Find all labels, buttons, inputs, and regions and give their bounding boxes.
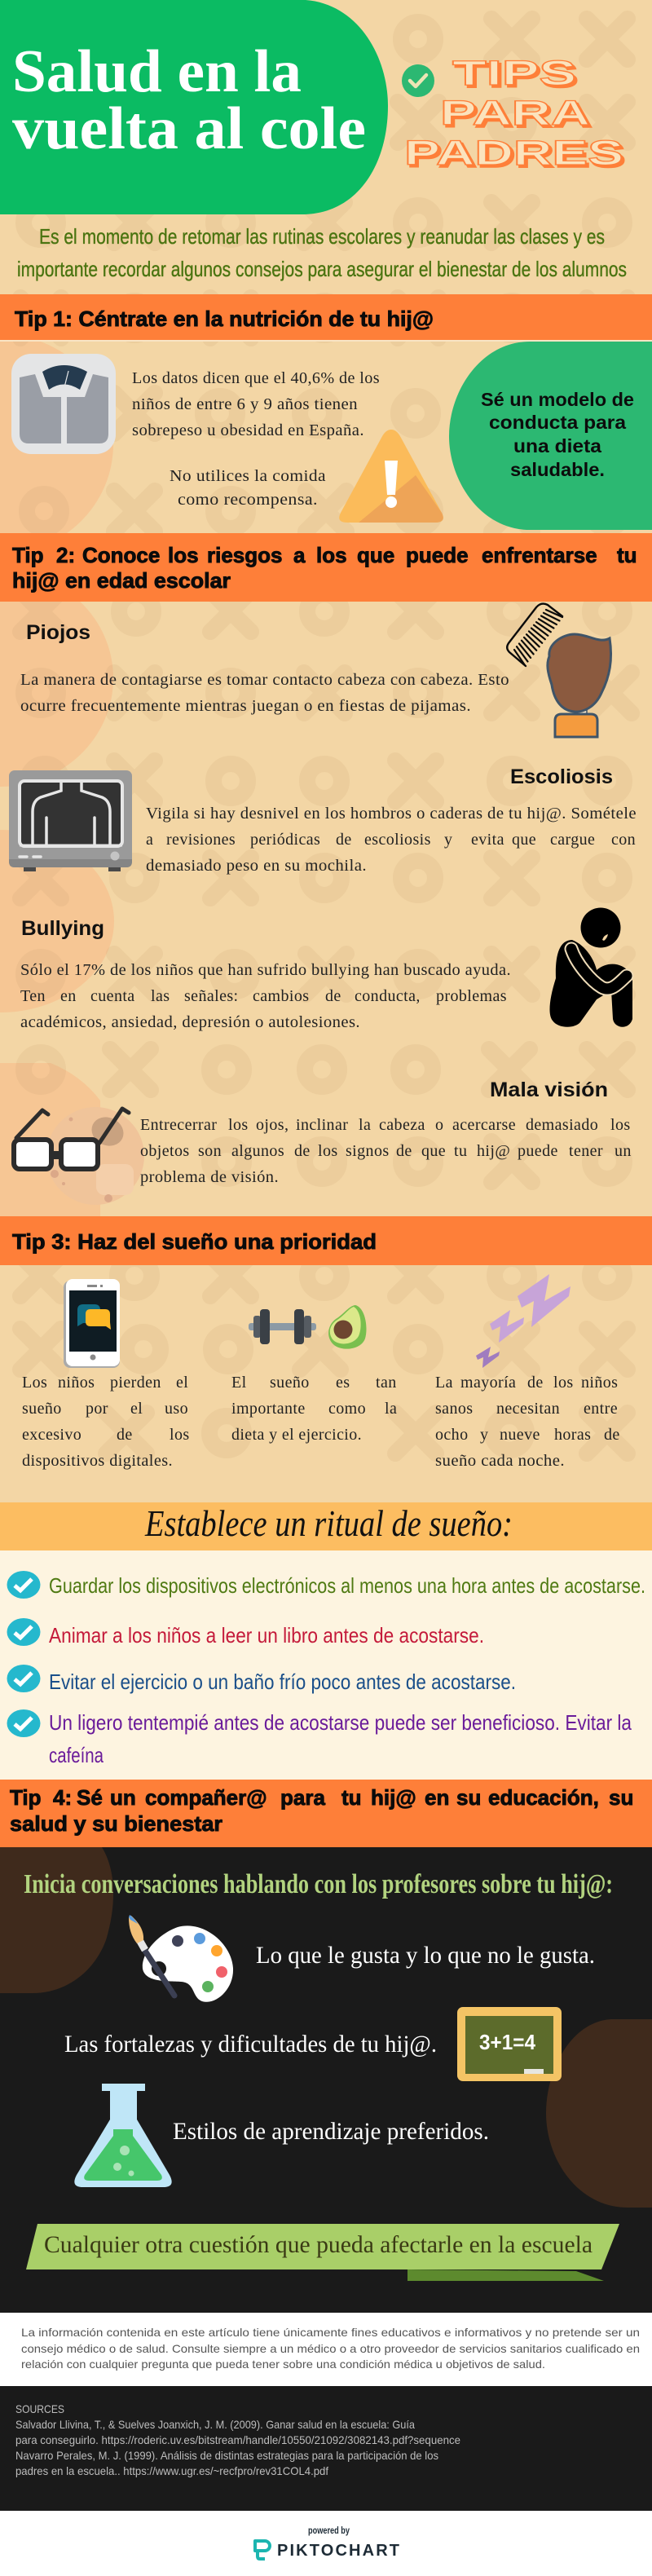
callout: role model: conducta para: [489, 412, 626, 433]
heading band: tip 4: [0, 1780, 652, 1847]
text block: sleep hours: y: [480, 1426, 488, 1444]
callout: role model: [449, 342, 652, 530]
text block: mala vision: algunos: [231, 1142, 284, 1160]
heading band: tip 4: para: [280, 1785, 325, 1810]
text block: bullying: en: [60, 987, 77, 1005]
text block: escoliosis: cargue: [550, 831, 595, 849]
text block: escoliosis: que: [512, 831, 536, 849]
text block: bullying: cuenta: [90, 987, 135, 1005]
list item: exercise: Evitar el ejercicio o un baño frío poco antes de acostarse.: [49, 1670, 516, 1694]
text block: mala vision: cabeza: [379, 1116, 425, 1134]
text block: mala vision: que: [421, 1142, 446, 1160]
panel: teacher conversations: [0, 1847, 652, 2313]
text block: bullying: cambios: [253, 987, 309, 1005]
heading band: tip 2: [0, 533, 652, 602]
heading band: tip 2: Conoce: [82, 543, 160, 567]
icon: flask: [74, 2084, 172, 2187]
text block: escoliosis: demasiado peso en su mochila.: [146, 857, 367, 875]
text block: mala vision: los: [318, 1142, 338, 1160]
heading band: tip 4: 4:: [53, 1785, 72, 1810]
heading band: tip 4: Sé: [77, 1785, 103, 1810]
heading band: tip 4: compañer@: [145, 1785, 267, 1810]
text block: devices: uso: [165, 1400, 188, 1418]
text block: sleep hours: ocho: [435, 1426, 468, 1444]
panel: disclaimer: consejo médico o de salud. Consulte siempre a un médico o a otro proveedor de servicios sanitarios cualificado en: [21, 2342, 640, 2355]
panel: sources: Navarro Perales, M. J. (1999). Análisis de distintas estrategias para la participación de los: [15, 2449, 438, 2462]
subtitle: tips para padres: PARA: [443, 96, 593, 135]
icon: blackboard: 3+1=4: [479, 2030, 536, 2054]
text block: sleep hours: La: [435, 1374, 453, 1392]
text block: devices: por: [86, 1400, 108, 1418]
heading: mala vision: Mala visión: [490, 1078, 608, 1101]
text block: sleep hours: nueve: [500, 1426, 540, 1444]
text block: sleep importance: El: [231, 1374, 247, 1392]
heading band: tip 4: su: [456, 1785, 481, 1810]
text: learning styles: Estilos de aprendizaje preferidos.: [173, 2118, 489, 2145]
panel: sources: para conseguirlo. https://roderic.uv.es/bitstream/handle/10550/21092/3082143.pdf?sequence: [15, 2433, 460, 2446]
heading band: tip 4: en: [425, 1785, 449, 1810]
panel: mala vision: [14, 1078, 632, 1205]
panel: disclaimer: [0, 2313, 652, 2386]
text block: mala vision: la: [359, 1116, 371, 1134]
subtitle: tips para padres: TIPS: [455, 56, 579, 95]
text block: devices: de: [117, 1426, 133, 1444]
text block: mala vision: de: [294, 1142, 311, 1160]
subtitle: tips para padres: [404, 54, 626, 175]
text block: sleep importance: como: [328, 1400, 366, 1418]
text block: mala vision: acercarse: [452, 1116, 516, 1134]
text block: piojos: La manera de contagiarse es tomar contacto cabeza con cabeza. Esto: [20, 671, 509, 689]
text block: sleep hours: sanos: [435, 1400, 473, 1418]
text block: mala vision: tu: [454, 1142, 467, 1160]
title: Salud en la: [12, 38, 302, 105]
text block: sleep importance: dieta y el ejercicio.: [231, 1426, 362, 1444]
text block: escoliosis: revisiones: [166, 831, 236, 849]
icon: warning triangle: [339, 430, 443, 523]
icon: dumbbell: [249, 1309, 316, 1344]
heading band: tip 2: que: [357, 543, 394, 567]
text block: mala vision: tener: [569, 1142, 603, 1160]
heading band: tip 2: los: [316, 543, 347, 567]
text block: mala vision: o: [435, 1116, 443, 1134]
panel: escoliosis: [9, 765, 637, 875]
title: vuelta al cole: [12, 95, 366, 162]
heading: bullying: Bullying: [21, 917, 104, 940]
text block: mala vision: Entrecerrar: [140, 1116, 217, 1134]
heading band: tip 3: Tip 3: Haz del sueño una prioridad: [12, 1229, 377, 1254]
list item: snack: cafeína: [49, 1743, 104, 1767]
ribbon: other issues: Cualquier otra cuestión que pueda afectarle en la escuela: [44, 2231, 593, 2258]
heading band: tip 2: los: [168, 543, 199, 567]
heading band: sleep ritual: Establece un ritual de sueño:: [144, 1502, 513, 1544]
list item: snack: [7, 1709, 632, 1767]
footer: piktochart: PIKTOCHART: [277, 2542, 399, 2560]
panel: bullying: [20, 908, 632, 1031]
text block: sleep importance: importante: [231, 1400, 306, 1418]
heading band: tip 3: [0, 1216, 652, 1265]
icon: phone: [64, 1279, 120, 1368]
text block: sleep importance: sueño: [270, 1374, 310, 1392]
text block: piojos: ocurre frecuentemente mientras juegan o en fiestas de pijamas.: [20, 697, 471, 715]
panel: sources: SOURCES: [15, 2402, 64, 2415]
text block: bullying: Sólo el 17% de los niños que han sufrido bullying han buscado ayuda.: [20, 961, 511, 979]
icon: child head: [548, 634, 611, 737]
text block: mala vision: problema de visión.: [140, 1168, 279, 1186]
text block: mala vision: hij@: [477, 1142, 510, 1160]
subtitle: tips para padres: PADRES: [404, 134, 623, 173]
heading band: tip 4: hij@: [371, 1785, 416, 1810]
heading band: tip 2: hij@ en edad escolar: [12, 568, 231, 593]
callout: role model: saludable.: [510, 459, 605, 480]
icon: zzz: [476, 1274, 570, 1368]
text block: obesity data: sobrepeso u obesidad en España.: [132, 421, 364, 439]
text block: escoliosis: periódicas: [250, 831, 320, 849]
text block: mala vision: ojos,: [256, 1116, 289, 1134]
heading band: tip 2: tu: [617, 543, 637, 567]
callout: role model: una dieta: [513, 435, 601, 457]
panel: sources: Salvador Llivina, T., & Suelves Joanxich, J. M. (2009). Ganar salud en la escuela: Guía: [15, 2418, 415, 2431]
footer: piktochart: [0, 2511, 652, 2576]
ribbon: other issues: [26, 2224, 619, 2281]
text block: devices: sueño: [22, 1400, 62, 1418]
text block: sleep hours: sueño cada noche.: [435, 1452, 565, 1470]
text block: mala vision: un: [615, 1142, 632, 1160]
text block: mala vision: demasiado: [526, 1116, 598, 1134]
text block: devices: el: [176, 1374, 188, 1392]
heading band: tip 2: puede: [406, 543, 469, 567]
text: strengths: Las fortalezas y dificultades de tu hij@.: [64, 2031, 437, 2058]
text block: obesity data: Los datos dicen que el 40,6% de los: [132, 369, 380, 387]
panel: sources: [0, 2386, 652, 2511]
heading: escoliosis: Escoliosis: [510, 765, 613, 788]
title panel: green blob: [0, 0, 388, 214]
callout: role model: Sé un modelo de: [481, 389, 634, 410]
icon: comb: [507, 604, 562, 666]
heading band: tip 2: riesgos: [207, 543, 282, 567]
text block: mala vision: los: [610, 1116, 631, 1134]
text block: mala vision: objetos: [140, 1142, 190, 1160]
text block: sleep hours: horas: [554, 1426, 591, 1444]
panel: sources: padres en la escuela.. https://www.ugr.es/~recfpro/rev31COL4.pdf: [15, 2464, 328, 2477]
text block: devices: Los: [22, 1374, 47, 1392]
text block: escoliosis: a: [146, 831, 153, 849]
text block: escoliosis: con: [611, 831, 636, 849]
text block: obesity data: niños de entre 6 y 9 años tienen: [132, 395, 358, 413]
heading band: sleep ritual: [0, 1502, 652, 1550]
text block: sleep importance: tan: [376, 1374, 397, 1392]
panel: disclaimer: La información contenida en este artículo tiene únicamente fines educativos e informativos y no pretende ser un: [21, 2326, 640, 2339]
heading band: tip 4: su: [609, 1785, 633, 1810]
text: likes and dislikes: Lo que le gusta y lo que no le gusta.: [256, 1942, 595, 1969]
text block: escoliosis: escoliosis: [364, 831, 431, 849]
text block: mala vision: son: [198, 1142, 222, 1160]
text block: bullying: de: [325, 987, 341, 1005]
text block: escoliosis: Vigila si hay desnivel en los hombros o caderas de tu hij@. Sométele: [146, 805, 637, 823]
icon: avocado: [328, 1305, 367, 1349]
list item: exercise: [7, 1665, 516, 1694]
list item: book: [7, 1618, 484, 1647]
text block: no food reward: No utilices la comida: [170, 467, 326, 485]
icon: green check badge: [402, 64, 434, 97]
text block: mala vision: los: [228, 1116, 249, 1134]
subtitle: tips para padres: TIPS: [452, 54, 576, 93]
heading band: tip 2: Tip: [12, 543, 44, 567]
text block: sleep hours: mayoría: [460, 1374, 516, 1392]
panel: disclaimer: relación con cualquier pregunta que pueda tener sobre una condición médica u objetivos de salud.: [21, 2358, 545, 2371]
text block: devices: pierden: [110, 1374, 161, 1392]
icon: x-ray machine: [9, 770, 132, 871]
text block: devices: dispositivos digitales.: [22, 1452, 173, 1470]
list item: book: Animar a los niños a leer un libro antes de acostarse.: [49, 1623, 484, 1647]
text block: escoliosis: de: [336, 831, 352, 849]
icon: glasses on planet blob: [14, 1107, 144, 1205]
text block: bullying: las: [151, 987, 170, 1005]
text block: sleep hours: necesitan: [496, 1400, 560, 1418]
text block: devices: excesivo: [22, 1426, 82, 1444]
panel: sleep hours column: [435, 1274, 620, 1470]
heading band: tip 1: Tip 1: Céntrate en la nutrición de tu hij@: [15, 307, 434, 331]
text block: sleep importance: es: [336, 1374, 350, 1392]
panel: piojos: [20, 604, 611, 737]
panel: ritual checklist: [0, 1550, 652, 1780]
text block: mala vision: de: [396, 1142, 412, 1160]
icon: paint palette: [129, 1915, 233, 2002]
text block: sleep hours: de: [527, 1374, 544, 1392]
text block: devices: el: [130, 1400, 143, 1418]
text block: sleep hours: de: [604, 1426, 620, 1444]
text block: sleep hours: los: [553, 1374, 574, 1392]
heading band: tip 4: tu: [341, 1785, 362, 1810]
heading band: tip 4: Tip: [10, 1785, 42, 1810]
footer: piktochart: powered by: [308, 2525, 350, 2536]
text block: no food reward: como recompensa.: [178, 491, 318, 509]
text block: bullying: problemas: [436, 987, 507, 1005]
text block: bullying: Ten: [20, 987, 46, 1005]
heading band: tip 2: 2:: [56, 543, 75, 567]
text block: devices: los: [170, 1426, 190, 1444]
text block: sleep hours: entre: [584, 1400, 618, 1418]
icon: bathroom scale: [11, 354, 116, 454]
text block: mala vision: signos: [346, 1142, 390, 1160]
text block: sleep importance: la: [385, 1400, 397, 1418]
panel: devices column: [22, 1279, 190, 1470]
heading band: tip 4: educación,: [488, 1785, 599, 1810]
text block: escoliosis: y: [444, 831, 452, 849]
heading band: tip 4: salud y su bienestar: [10, 1811, 222, 1836]
heading band: tip 4: un: [110, 1785, 136, 1810]
text block: mala vision: inclinar: [296, 1116, 348, 1134]
panel: diet and exercise column: [231, 1305, 397, 1444]
text block: bullying: conducta,: [355, 987, 421, 1005]
text block: sleep hours: niños: [581, 1374, 618, 1392]
text block: escoliosis: evita: [471, 831, 504, 849]
text block: bullying: señales:: [184, 987, 239, 1005]
text block: bullying: académicos, ansiedad, depresión o autolesiones.: [20, 1013, 360, 1031]
icon: blackboard: [457, 2007, 562, 2081]
subtitle: tips para padres: PADRES: [407, 136, 626, 175]
text block: devices: niños: [58, 1374, 95, 1392]
heading band: tip 2: a: [293, 543, 306, 567]
subtitle: tips para padres: PARA: [440, 94, 590, 133]
text block: mala vision: puede: [518, 1142, 558, 1160]
heading: piojos: Piojos: [26, 621, 90, 644]
heading band: tip 1: [0, 294, 652, 342]
heading band: tip 2: enfrentarse: [482, 543, 597, 567]
icon: sad sitting child: [550, 908, 632, 1027]
